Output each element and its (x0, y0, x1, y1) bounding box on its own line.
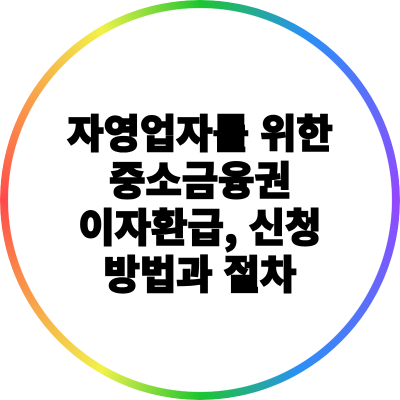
title: 방법과 절차 (104, 244, 296, 301)
title (66, 102, 333, 301)
title: 자영업자를 위한 (67, 102, 333, 160)
title: 중소금융권 (109, 150, 291, 207)
title: 이자환급, 신청 (78, 197, 322, 254)
